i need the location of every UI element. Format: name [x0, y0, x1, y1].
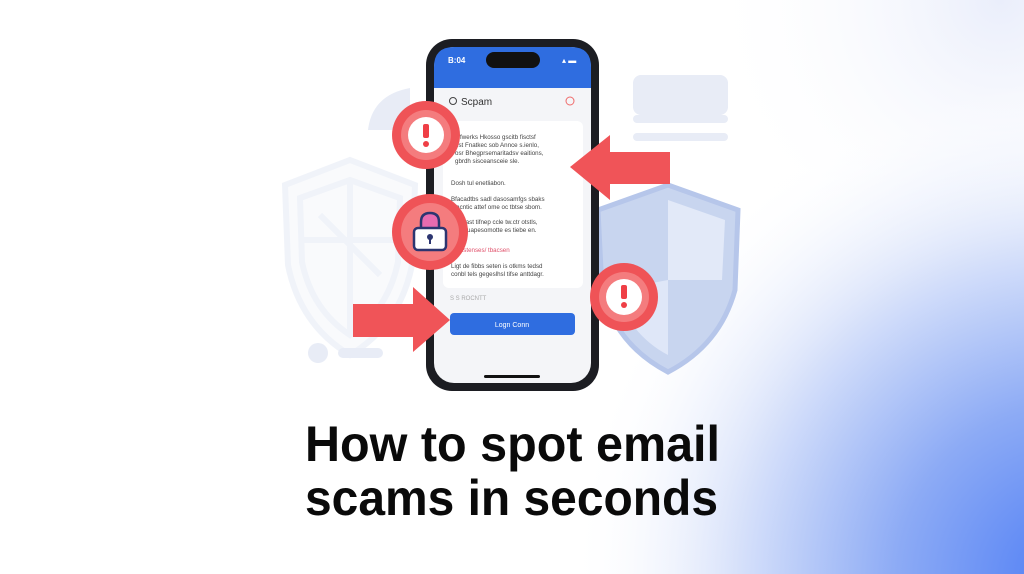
background decor: top shapes — [308, 75, 728, 363]
email header: Scpam — [461, 97, 492, 108]
email card: gbrdh sisceansceie sle. — [455, 158, 520, 165]
email card: conbl tels gegeslhsl tifse anttdagr. — [451, 271, 544, 278]
email card: Bfacadtbs sadl dasosamfgs sbaks — [451, 196, 545, 203]
email card: for tast tifnep ccle tw.ctr otstls, — [455, 219, 538, 226]
background decor: left shield — [285, 160, 415, 355]
phone: B:04 — [448, 56, 466, 65]
email card: Dosh tul enetliabon. — [451, 180, 506, 187]
title: How to spot email — [305, 416, 720, 472]
email card: ust Fnatkec sob Annce s.ienlo, — [455, 142, 539, 149]
email card: ntuf uapesomotte es tiebe en. — [455, 227, 537, 234]
icon: exclamation right — [590, 263, 658, 331]
login button — [450, 313, 575, 335]
email card: osr Bhegprsemaritadsv eaitions, — [455, 150, 544, 157]
login button: Logn Conn — [495, 322, 529, 329]
title — [305, 416, 720, 526]
background decor: right shield — [598, 185, 738, 372]
email card: atacntic attef ome oc tbtse sbom. — [451, 204, 542, 211]
phone: ▴ ▬ — [562, 56, 576, 65]
phone — [426, 39, 599, 391]
email card: rfwerks Hkosso gscitb fisctsf — [458, 134, 536, 141]
icon: exclamation top — [392, 101, 460, 169]
arrow: right pointing left — [570, 135, 670, 200]
title: scams in seconds — [305, 470, 718, 526]
icon: lock — [392, 194, 468, 270]
email header — [450, 97, 574, 108]
arrow: left pointing right — [353, 287, 450, 352]
phone: S S ROCNTT — [450, 296, 487, 302]
email card: Ligt de fibbs seten is otkms tedsd — [451, 263, 543, 270]
email card — [443, 121, 583, 288]
email card: ouistenses/ tbacsen — [455, 247, 510, 254]
